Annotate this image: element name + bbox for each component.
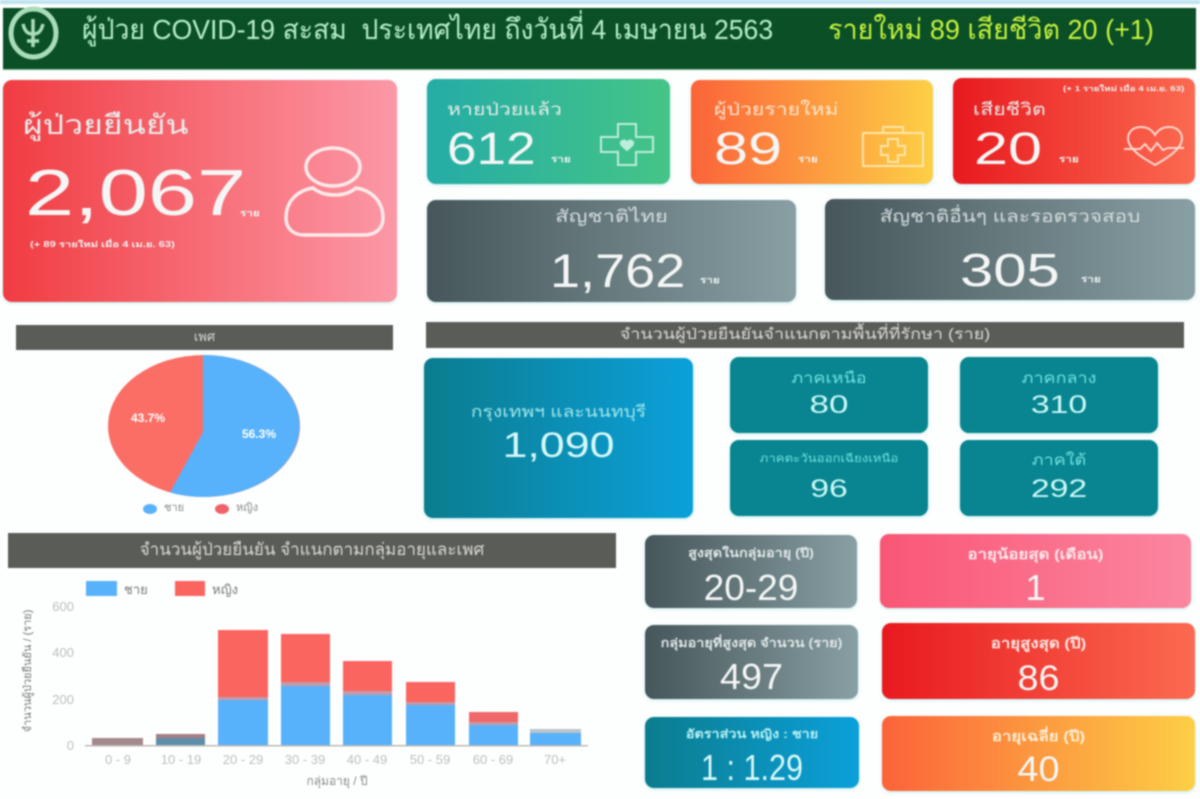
x axis labels: 0 - 9 xyxy=(105,752,131,767)
label: สูงสุดในกลุ่มอายุ (ปี) xyxy=(688,546,814,560)
unit: ราย xyxy=(700,275,720,285)
note: (+ 89 รายใหม่ เมื่อ 4 เม.ย. 63) xyxy=(30,240,175,249)
number: 1 : 1.29 xyxy=(701,747,803,788)
x axis labels: 20 - 29 xyxy=(223,752,263,767)
label: อายุเฉลี่ย (ปี) xyxy=(992,728,1085,744)
number: 89 xyxy=(714,123,782,174)
number: 80 xyxy=(810,391,848,419)
panel: northeast xyxy=(730,440,928,516)
legend: female: หญิง xyxy=(212,582,238,597)
legend: male xyxy=(86,581,148,597)
unit: ราย xyxy=(240,208,260,218)
panel: confirmed cases xyxy=(3,80,397,302)
y axis labels: 200 xyxy=(52,692,74,707)
number: 292 xyxy=(1031,475,1087,503)
y axis labels: 400 xyxy=(52,645,74,660)
heading: sex: เพศ xyxy=(194,329,215,344)
icon: medical cross xyxy=(599,122,655,167)
number: 1,090 xyxy=(502,426,615,465)
heading: age and sex: จำนวนผู้ป่วยยืนยัน จำแนกตามกลุ่มอายุและเพศ xyxy=(140,540,484,559)
number: 310 xyxy=(1031,391,1087,419)
number: 2,067 xyxy=(25,156,246,229)
icon: first aid kit xyxy=(861,125,925,168)
panel: recovered xyxy=(427,79,670,184)
label: อัตราส่วน หญิง : ชาย xyxy=(686,727,818,741)
axis line xyxy=(85,745,588,746)
heading: age and sex xyxy=(8,533,616,568)
panel: oldest age xyxy=(882,623,1195,699)
number: 497 xyxy=(720,656,783,697)
unit: ราย xyxy=(551,154,571,164)
number: 96 xyxy=(810,475,848,503)
x axis labels: 60 - 69 xyxy=(473,752,513,767)
x axis labels: 70+ xyxy=(544,752,566,767)
number: 1,762 xyxy=(550,244,685,297)
top strip xyxy=(0,0,1200,4)
label: สัญชาติไทย xyxy=(555,207,668,226)
y axis labels: 600 xyxy=(52,599,74,614)
y axis labels: 0 xyxy=(67,738,74,753)
label: สัญชาติอื่นๆ และรอตรวจสอบ xyxy=(880,207,1140,226)
panel: north xyxy=(730,357,928,433)
x axis labels: 10 - 19 xyxy=(161,752,201,767)
legend: male: ชาย xyxy=(124,582,148,597)
unit: ราย xyxy=(1081,274,1101,284)
label: อายุสูงสุด (ปี) xyxy=(991,635,1086,651)
legend: sex: ชาย xyxy=(164,502,184,514)
panel: new cases xyxy=(691,80,933,184)
legend: sex xyxy=(142,501,258,515)
headline new cases: รายใหม่ 89 เสียชีวิต 20 (+1) xyxy=(828,14,1154,45)
panel: most common age group xyxy=(645,535,857,608)
icon: person xyxy=(283,146,386,238)
panel: youngest age xyxy=(880,534,1191,608)
icon: ministry logo xyxy=(8,6,60,60)
label: หายป่วยแล้ว xyxy=(447,100,562,119)
legend: female xyxy=(175,581,238,597)
label: ผู้ป่วยรายใหม่ xyxy=(714,100,839,119)
panel: deaths xyxy=(953,78,1195,184)
panel: other nationals xyxy=(825,199,1195,300)
label: ภาคใต้ xyxy=(1032,452,1086,469)
bar chart: cases by age and sex xyxy=(21,580,588,789)
y axis labels xyxy=(52,599,74,753)
number: 305 xyxy=(960,244,1060,296)
label: อายุน้อยสุด (เดือน) xyxy=(967,546,1104,562)
number: 20 xyxy=(974,123,1042,174)
pie chart: sex xyxy=(107,354,301,498)
panel: Thai nationals xyxy=(427,200,796,302)
title banner xyxy=(3,8,1196,70)
heading: sex xyxy=(16,325,393,350)
legend: sex: หญิง xyxy=(236,502,258,514)
y axis title: จำนวนผู้ป่วยยืนยัน / (ราย) xyxy=(21,610,34,732)
pie chart: sex: 56.3% xyxy=(242,427,276,441)
title text: ผู้ป่วย COVID-19 สะสม ประเทศไทย ถึงวันที่ 4 เมษายน 2563 xyxy=(82,14,773,45)
note: (+ 1 รายใหม่ เมื่อ 4 เม.ย. 63) xyxy=(1063,86,1184,93)
number: 40 xyxy=(1017,750,1060,789)
unit: ราย xyxy=(798,154,818,164)
bars xyxy=(92,630,581,745)
panel: south xyxy=(960,440,1158,516)
unit: ราย xyxy=(1059,154,1079,164)
icon: heart pulse xyxy=(1123,125,1185,167)
x axis labels: 30 - 39 xyxy=(285,752,325,767)
panel: Bangkok and Nonthaburi xyxy=(424,358,693,518)
panel: largest group count xyxy=(645,625,858,699)
number: 20-29 xyxy=(704,567,798,608)
panel: central xyxy=(960,357,1158,433)
heading: treatment area xyxy=(426,322,1184,348)
panel: sex ratio xyxy=(645,717,859,788)
panel: average age xyxy=(882,716,1195,791)
x axis labels: 50 - 59 xyxy=(410,752,450,767)
label: ภาคเหนือ xyxy=(791,370,867,387)
heading text: จำนวนผู้ป่วยยืนยันจำแนกตามพื้นที่ที่รักษา (ราย) xyxy=(620,326,990,343)
number: 612 xyxy=(447,123,536,174)
label: ภาคกลาง xyxy=(1022,370,1096,387)
label: เสียชีวิต xyxy=(973,100,1046,119)
x axis labels: 40 - 49 xyxy=(347,752,387,767)
number: 86 xyxy=(1017,659,1060,698)
x axis title: กลุ่มอายุ / ปี xyxy=(306,774,368,789)
label: ผู้ป่วยยืนยัน xyxy=(23,110,189,140)
x axis labels xyxy=(105,752,566,767)
pie chart: sex: 43.7% xyxy=(131,411,165,425)
label: ภาคตะวันออกเฉียงเหนือ xyxy=(760,453,898,465)
label: กรุงเทพฯ และนนทบุรี xyxy=(471,404,646,421)
label: กลุ่มอายุที่สูงสุด จำนวน (ราย) xyxy=(661,636,842,650)
number: 1 xyxy=(1025,567,1046,608)
